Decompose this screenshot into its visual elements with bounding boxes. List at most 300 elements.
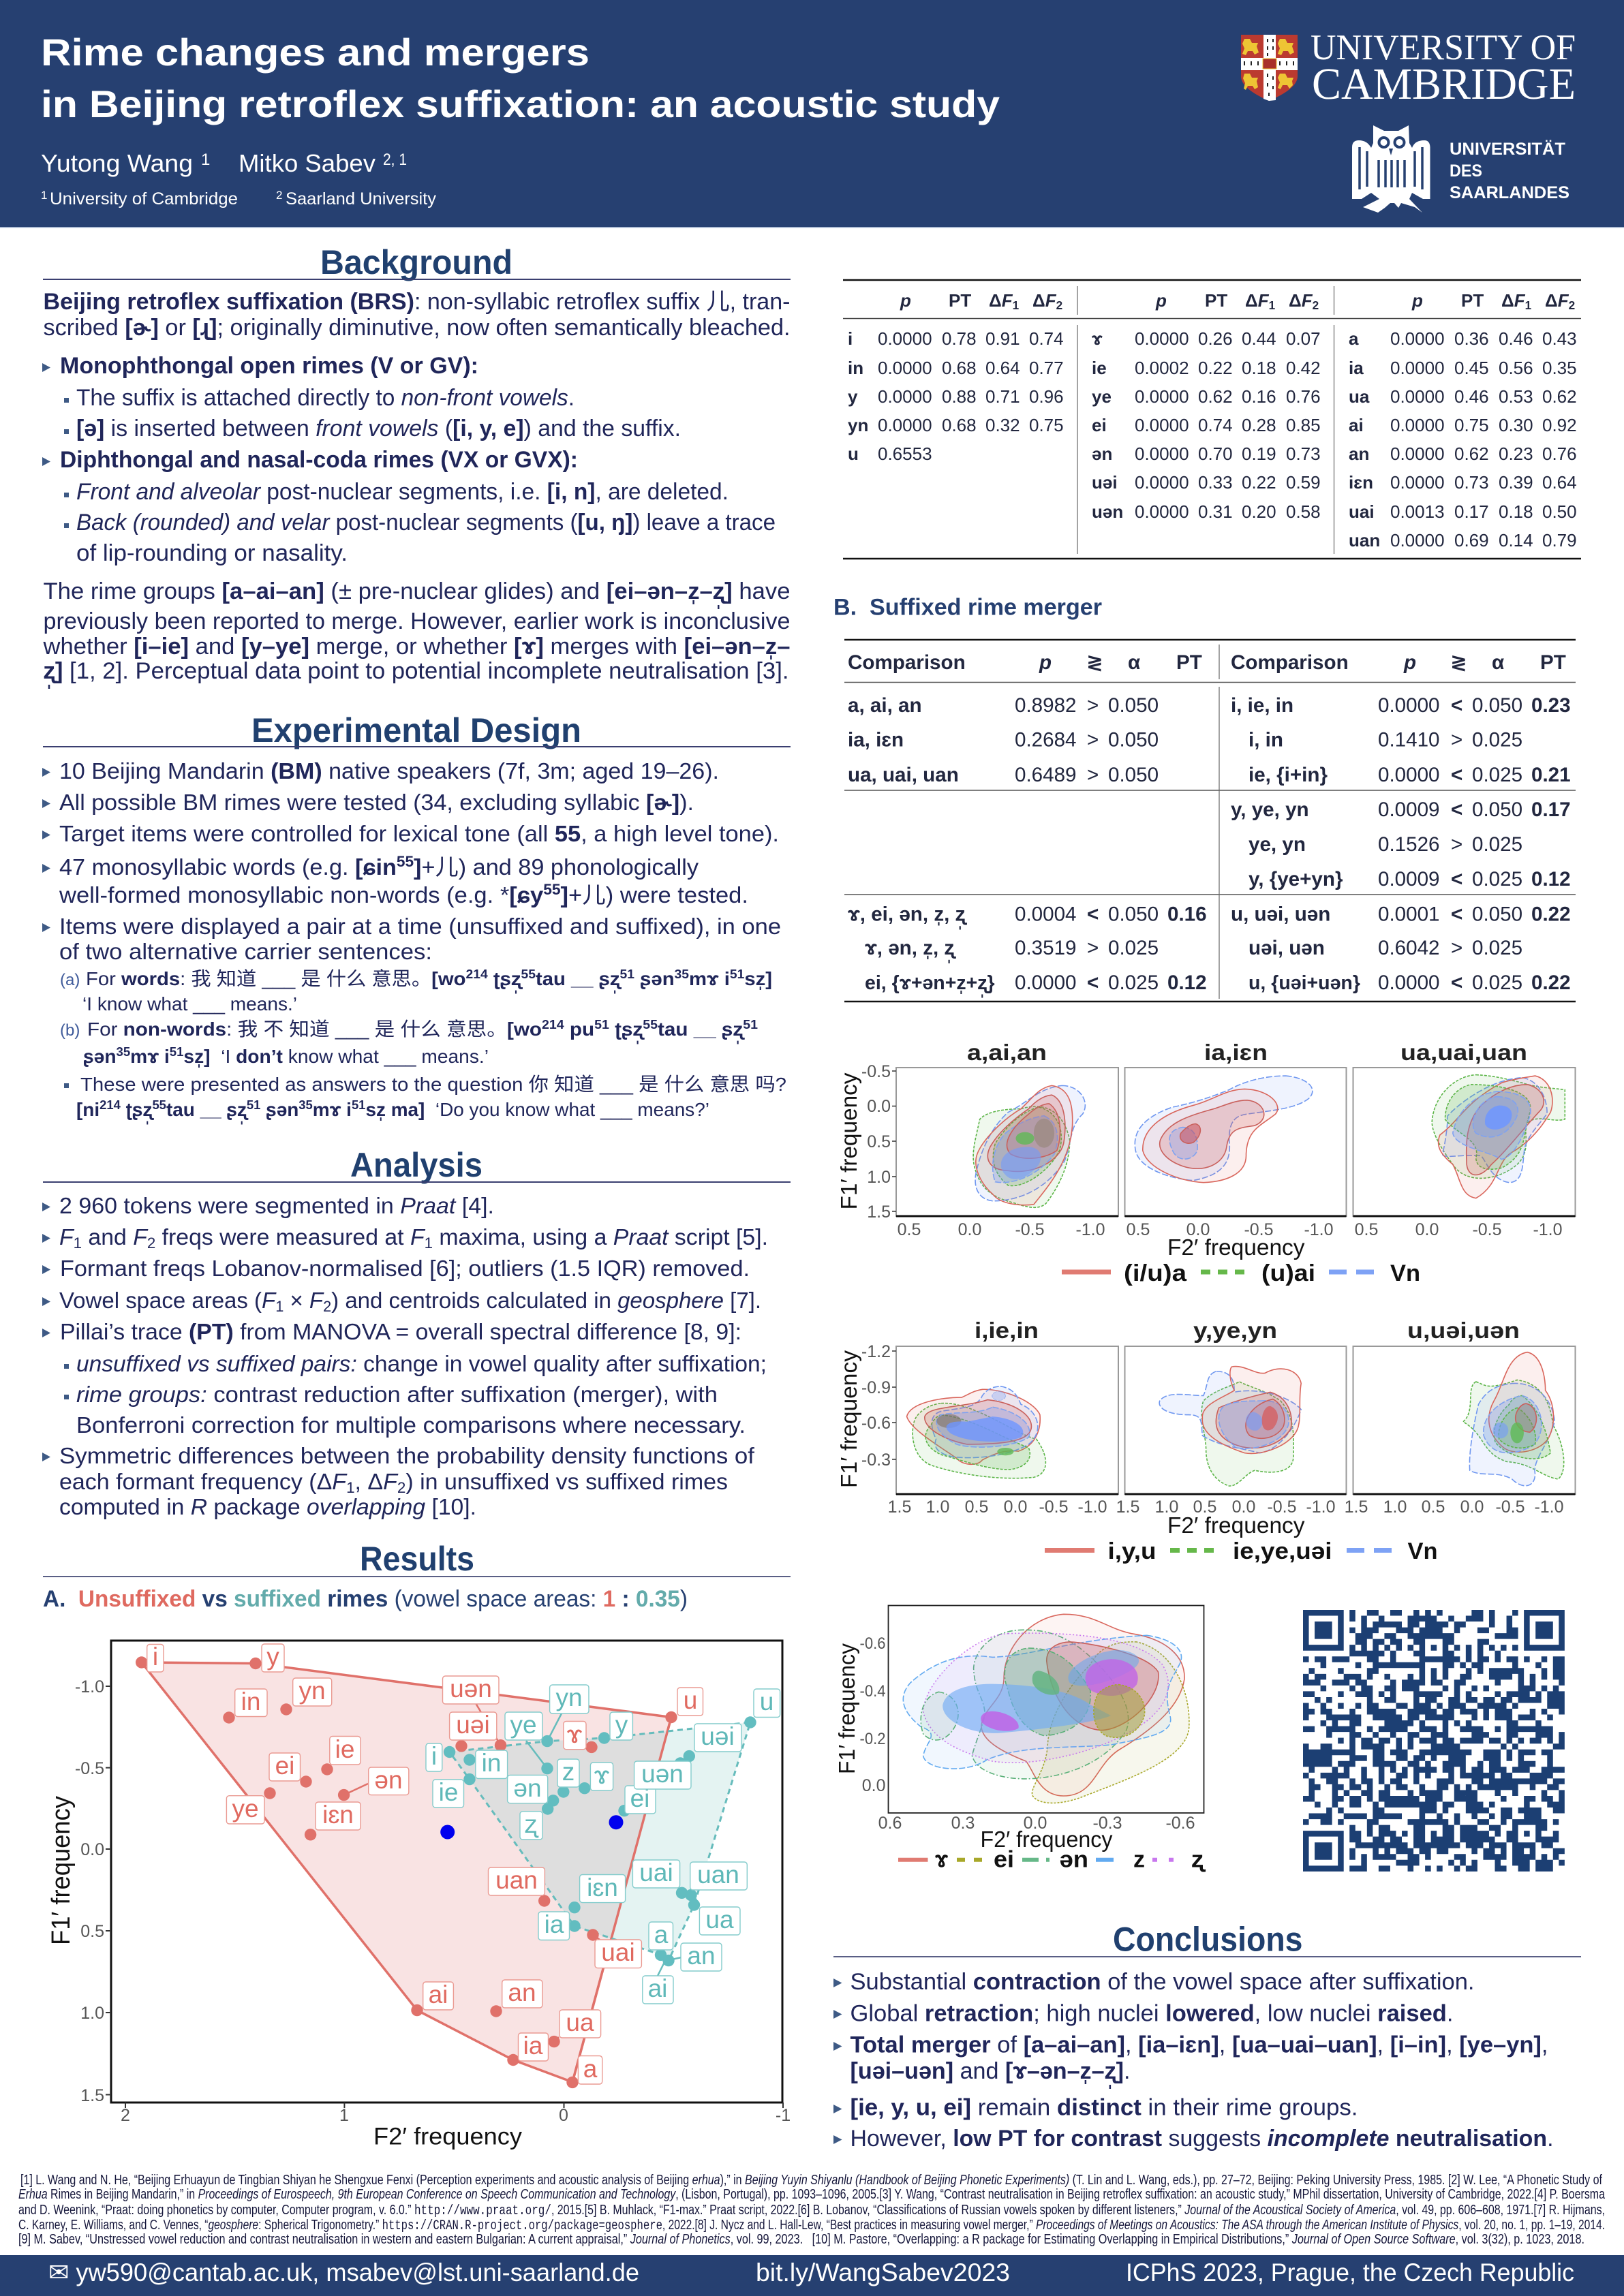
axis ticks: 1.0 xyxy=(80,2004,104,2023)
table rows: 0.0009 xyxy=(1378,798,1440,821)
axis ticks: -0.5 xyxy=(75,1759,104,1778)
panel frames xyxy=(896,1346,1576,1494)
table rows: > xyxy=(1451,937,1462,959)
tick labels: -1.0 xyxy=(1304,1220,1334,1239)
bullet list: conclusions: [uəi–uən] and [ɤ–ən–z̩–ʐ̩]. xyxy=(851,2058,1130,2089)
axis ticks: -1.0 xyxy=(75,1677,104,1696)
footer xyxy=(0,2255,1624,2296)
text block: previous work xyxy=(42,578,791,689)
table rows: 0.32 xyxy=(985,415,1020,435)
labels: suffixed rimes: in xyxy=(482,1749,501,1777)
labels: unsuffixed rimes: ie xyxy=(335,1735,354,1763)
table rows: 0.025 xyxy=(1472,937,1522,959)
table rows: ai xyxy=(1349,415,1364,435)
bullet list: rime types: of lip-rounding or nasality. xyxy=(76,540,348,566)
axis ticks: 2 xyxy=(121,2106,130,2125)
labels: unsuffixed rimes: a xyxy=(583,2055,598,2083)
tick labels: -0.9 xyxy=(861,1378,891,1397)
table rows: 0.85 xyxy=(1286,415,1321,435)
axis ticks: 0.5 xyxy=(80,1922,104,1941)
table rows: 0.23 xyxy=(1499,444,1533,464)
bullet list: rime types: Monophthongal open rimes (V or GV): xyxy=(60,353,478,379)
table rows: 0.2684 xyxy=(1015,729,1077,751)
references: C. Karney, E. Williams, and C. Vennes, “geosphere: Spherical Trigonometry.” https://CRAN.R-project.org/package=geosphere, 2022.[8] J. Nycz and L. Hall-Lew, “Best practices in measuring vowel merger,” Proceedings of Meetings on Acoustics: The ASA through the American Institute of Physics, vol. 20, no. 1, pp. 1–19, 2014. xyxy=(18,2218,1605,2234)
text block: carrier sentences: ʂən35mɤ i51sz̩] ‘I don’t know what ___ means.’ xyxy=(83,1044,489,1068)
table rows: 0.56 xyxy=(1499,358,1533,378)
legend xyxy=(1062,1260,1420,1286)
table rows: > xyxy=(1087,764,1099,786)
bullet list: design: 10 Beijing Mandarin (BM) native speakers (7f, 3m; aged 19–26). xyxy=(59,758,719,784)
table rows: 0.0000 xyxy=(1378,972,1440,994)
bullet list: rime types: Back (rounded) and velar post-nuclear segments ([u, ŋ]) leave a trace xyxy=(76,510,776,536)
table rows: 0.050 xyxy=(1472,694,1522,717)
panel titles: u,uəi,uən xyxy=(1407,1318,1520,1343)
labels: suffixed rimes: y xyxy=(615,1711,628,1739)
panel: analysis xyxy=(42,1146,791,1519)
logo: University of Cambridge xyxy=(1241,28,1576,109)
tick labels: 0.5 xyxy=(867,1132,891,1151)
table rows: 0.74 xyxy=(1198,415,1233,435)
table rows: 0.74 xyxy=(1029,328,1064,349)
header banner xyxy=(0,0,1624,228)
table rows: an xyxy=(1349,444,1369,464)
table rows: 0.50 xyxy=(1542,501,1577,522)
heading B: B. Suffixed rime merger xyxy=(833,594,1102,620)
table rows xyxy=(848,694,1571,998)
tick labels: -1.0 xyxy=(1306,1498,1336,1517)
table rows: 0.77 xyxy=(1029,358,1064,378)
bullet list: rime types: The suffix is attached directly to non-front vowels. xyxy=(76,385,574,411)
table rows: 0.1410 xyxy=(1378,729,1440,751)
table rows: a xyxy=(1349,328,1359,349)
heading: Analysis: Analysis xyxy=(350,1146,482,1184)
labels: suffixed rimes: a xyxy=(654,1921,669,1949)
table rows: uən xyxy=(1092,501,1123,522)
table rows: 0.6489 xyxy=(1015,764,1077,786)
tick labels: -0.5 xyxy=(1472,1220,1502,1239)
labels: suffixed rimes: uən xyxy=(641,1760,684,1788)
table rows: 0.19 xyxy=(1242,444,1276,464)
table rows: y, {ye+yn} xyxy=(1248,868,1343,890)
table rows: 0.21 xyxy=(1531,764,1571,786)
tick labels: 0.0 xyxy=(1004,1498,1027,1517)
table header: ΔF2 xyxy=(1032,290,1062,312)
panel frames xyxy=(896,1068,1576,1216)
bullet list: design: All possible BM rimes were tested (34, excluding syllabic [ɚ]). xyxy=(59,790,694,815)
table rows: 0.0000 xyxy=(1390,444,1445,464)
tick labels: 0.5 xyxy=(1355,1220,1378,1239)
text block: carrier sentences: (a) xyxy=(60,971,80,989)
text block: definition: Beijing retroflex suffixation (BRS): non-syllabic retroflex suffix 儿, tran- xyxy=(44,289,791,315)
panel: conclusions xyxy=(833,1921,1581,2152)
table rows: 0.62 xyxy=(1198,386,1233,407)
tick labels: 0.0 xyxy=(958,1220,981,1239)
area: suffixed vowel space xyxy=(450,1722,750,1961)
table rows: 0.0000 xyxy=(1135,386,1189,407)
table rows: 0.025 xyxy=(1472,972,1522,994)
tick labels: -1.0 xyxy=(1077,1498,1107,1517)
table header: Comparison xyxy=(848,651,966,674)
table header: ΔF2 xyxy=(1545,290,1575,312)
panel titles: a,ai,an xyxy=(967,1040,1047,1065)
labels: unsuffixed rimes: i xyxy=(153,1643,158,1671)
legend: ʐ xyxy=(1191,1846,1206,1872)
labels: unsuffixed rimes: ia xyxy=(523,2032,543,2060)
tick labels xyxy=(860,1634,1195,1833)
table header: α xyxy=(1128,651,1140,674)
text block: carrier sentences xyxy=(60,966,786,1125)
table header: Comparison xyxy=(1231,651,1349,674)
tick labels: 1.5 xyxy=(1116,1498,1139,1517)
bullet list: analysis: 2 960 tokens were segmented in Praat [4]. xyxy=(59,1193,494,1218)
table rows: 0.44 xyxy=(1242,328,1276,349)
table rows: 0.18 xyxy=(1499,501,1533,522)
table rows: a, ai, an xyxy=(848,694,922,717)
axis label: F1: F1′ frequency xyxy=(836,1350,861,1488)
table header: p xyxy=(1155,290,1167,311)
table rows: 0.0000 xyxy=(1378,764,1440,786)
table rows: 0.45 xyxy=(1454,358,1489,378)
table rows: 0.69 xyxy=(1454,530,1489,550)
table rows: 0.0002 xyxy=(1135,358,1189,378)
table rows: 0.17 xyxy=(1531,798,1571,821)
text block: previous work: previously been reported to merge. However, earlier work is inconclusive xyxy=(44,608,791,634)
table rows: > xyxy=(1451,729,1462,751)
tick labels: -0.5 xyxy=(1267,1498,1297,1517)
labels: suffixed rimes: ua xyxy=(705,1906,734,1934)
bullet list: conclusions: Total merger of [a–ai–an], [ia–iɛn], [ua–uai–uan], [i–in], [ye–yn], xyxy=(851,2032,1548,2058)
table rows: 0.0000 xyxy=(1390,415,1445,435)
table rows: 0.75 xyxy=(1029,415,1064,435)
tick labels: -0.5 xyxy=(861,1062,891,1081)
table rows xyxy=(848,328,1577,550)
table rows: 0.36 xyxy=(1454,328,1489,349)
legend xyxy=(898,1846,1206,1872)
table rows: 0.73 xyxy=(1286,444,1321,464)
density contours xyxy=(973,1075,1565,1207)
table rows: > xyxy=(1451,833,1462,856)
labels: unsuffixed rimes: ən xyxy=(374,1766,403,1794)
table rows: 0.64 xyxy=(1542,472,1577,493)
table rows: 0.17 xyxy=(1454,501,1489,522)
tick labels: -0.4 xyxy=(860,1682,886,1701)
table rows: 0.6553 xyxy=(878,444,932,464)
table rows: 0.050 xyxy=(1472,903,1522,925)
table rows: ən xyxy=(1092,444,1112,464)
subheading: Unsuffixed vs suffixed rimes: A. Unsuffixed vs suffixed rimes (vowel space areas: 1 : 0.35) xyxy=(43,1586,688,1612)
bullet list: analysis: Vowel space areas (F1 × F2) and centroids calculated in geosphere [7]. xyxy=(59,1288,761,1315)
labels: suffixed rimes: z xyxy=(562,1758,574,1786)
text block: carrier sentences: For words: 我 知道 ___ 是 什么 意思。 [wo214 ʈʂʐ̩55tau __ ʂʐ̩ 51 ʂən35mɤ i51sz̩] xyxy=(86,966,772,994)
table header: p xyxy=(1411,290,1423,311)
labels: unsuffixed rimes: iɛn xyxy=(322,1801,354,1829)
table rows: 0.8982 xyxy=(1015,694,1077,717)
legend: (i/u)a xyxy=(1124,1260,1187,1286)
labels: unsuffixed rimes xyxy=(147,1643,703,2084)
tick labels: 0.5 xyxy=(898,1220,921,1239)
panel: results A xyxy=(43,1540,791,2150)
plot frame xyxy=(889,1605,1204,1813)
table header: p xyxy=(1039,651,1052,674)
panel: experimental design xyxy=(42,711,791,1125)
bullet list: rime types xyxy=(42,353,776,566)
labels: suffixed rimes: ʐ xyxy=(525,1810,539,1838)
tick labels: -0.6 xyxy=(860,1634,886,1653)
table rows: 0.70 xyxy=(1198,444,1233,464)
chart: density plots row 1 xyxy=(836,1040,1576,1286)
tick labels: 1.0 xyxy=(926,1498,949,1517)
text block: carrier sentences: [ni214 ʈʂʐ̩55tau __ ʂʐ̩51 ʂən35mɤ i51sz̩ ma] ‘Do you know what ___ means?’ xyxy=(76,1097,709,1125)
table rows: 0.46 xyxy=(1499,328,1533,349)
axis ticks xyxy=(75,1677,791,2125)
tick labels: 0.0 xyxy=(867,1097,891,1116)
tick labels: -1.0 xyxy=(1075,1220,1105,1239)
table rows: 0.30 xyxy=(1499,415,1533,435)
tick labels: 0.0 xyxy=(1232,1498,1255,1517)
labels: suffixed rimes: iɛn xyxy=(587,1874,618,1902)
table rows: 0.025 xyxy=(1472,729,1522,751)
table rows: 0.22 xyxy=(1531,903,1571,925)
table rows: 0.0000 xyxy=(1390,328,1445,349)
logo: Universität des Saarlandes: UNIVERSITÄT xyxy=(1450,140,1565,159)
table rows: < xyxy=(1451,903,1462,925)
logo: Universität des Saarlandes: DES xyxy=(1450,161,1482,181)
labels: suffixed rimes: uəi xyxy=(701,1722,735,1750)
axis ticks: -1 xyxy=(776,2106,791,2125)
labels: unsuffixed rimes: u xyxy=(684,1686,697,1714)
heading: Conclusions: Conclusions xyxy=(1113,1921,1303,1959)
density contours xyxy=(907,1352,1564,1486)
table header: ≷ xyxy=(1450,651,1467,674)
table rows: 0.96 xyxy=(1029,386,1064,407)
labels: unsuffixed rimes: uai xyxy=(601,1938,635,1966)
tick labels: -0.6 xyxy=(1165,1814,1195,1833)
authors: Mitko Sabev xyxy=(239,149,376,177)
table rows: ia, iɛn xyxy=(848,729,904,751)
table rows: 0.16 xyxy=(1242,386,1276,407)
panel titles xyxy=(967,1040,1527,1065)
labels: suffixed rimes: ia xyxy=(545,1910,564,1938)
table rows: uəi xyxy=(1092,472,1118,493)
references: and D. Weenink, “Praat: doing phonetics by computer, Computer program, v. 6.0.” http://www.praat.org/, 2015.[5] B. Muhlack, “F1-max.” Praat script, 2022.[6] B. Lobanov, “Classifications of Russian vowels spoken by different listeners,” Journal of the Acoustical Society of America, vol. 49, pp. 606–608, 1971.[7] R. Hijmans, xyxy=(18,2203,1605,2219)
tick labels: -1.0 xyxy=(1534,1498,1564,1517)
axis label: F1: F1′ frequency xyxy=(834,1643,859,1774)
table rows: yn xyxy=(848,415,868,435)
table rows: ɤ, ei, ən, z̩, ʐ̩ xyxy=(848,903,968,929)
labels: suffixed rimes: uai xyxy=(639,1859,673,1887)
table rows: > xyxy=(1087,729,1099,751)
markers: red and teal points xyxy=(136,1656,756,2088)
table rows: y xyxy=(848,386,858,407)
title: Rime changes and mergers xyxy=(41,31,589,74)
table rows: ie, {i+in} xyxy=(1248,764,1328,786)
text block: previous work: ʐ̩] [1, 2]. Perceptual data point to potential incomplete neutralisation [3]. xyxy=(44,658,789,689)
tick labels: -1.2 xyxy=(861,1342,891,1361)
tick labels: 0.5 xyxy=(1193,1498,1216,1517)
bullet list: rime types: Front and alveolar post-nuclear segments, i.e. [i, n], are deleted. xyxy=(76,479,729,505)
table rows: 0.0000 xyxy=(1378,694,1440,717)
table rows: 0.68 xyxy=(942,358,977,378)
tick labels: -0.6 xyxy=(861,1414,891,1433)
bullet list: rime types: [ə] is inserted between front vowels ([i, y, e]) and the suffix. xyxy=(76,416,681,441)
footer: ICPhS 2023, Prague, the Czech Republic xyxy=(1126,2259,1574,2286)
table rows: < xyxy=(1451,868,1462,890)
table rows: 0.0013 xyxy=(1390,501,1445,522)
text block: carrier sentences: These were presented as answers to the question 你 知道 ___ 是 什么 意思 吗? xyxy=(80,1074,786,1095)
table rows: 0.0001 xyxy=(1378,903,1440,925)
axis label: F1: F1′ frequency xyxy=(836,1072,861,1210)
affiliations: University of Cambridge xyxy=(50,189,238,208)
table rows: ia xyxy=(1349,358,1364,378)
table rows: < xyxy=(1451,798,1462,821)
table rows: ua, uai, uan xyxy=(848,764,959,786)
bullet list: conclusions: Global retraction; high nuclei lowered, low nuclei raised. xyxy=(851,2000,1453,2026)
table rows: 0.62 xyxy=(1454,444,1489,464)
legend: ei xyxy=(994,1846,1014,1872)
bullet list: analysis: each formant frequency (Δ F1, ΔF2) in unsuffixed vs suffixed rimes xyxy=(59,1469,728,1496)
legend: z xyxy=(1133,1846,1145,1872)
tick labels: 1.5 xyxy=(1345,1498,1368,1517)
chart: vowel space polygons xyxy=(47,1641,791,2150)
labels: suffixed rimes: ən xyxy=(513,1774,542,1802)
legend xyxy=(1045,1538,1438,1564)
table header: ΔF2 xyxy=(1289,290,1319,312)
table rows: 0.0009 xyxy=(1378,868,1440,890)
table rows: 0.0000 xyxy=(1390,358,1445,378)
tick labels: 0.0 xyxy=(1186,1220,1210,1239)
tick labels: 0.5 xyxy=(1127,1220,1150,1239)
axis label: F2: F2′ frequency xyxy=(1167,1235,1305,1260)
tick labels: 0.0 xyxy=(1460,1498,1484,1517)
labels: suffixed rimes: uan xyxy=(697,1861,739,1889)
labels: unsuffixed rimes: ei xyxy=(275,1752,294,1780)
text block: carrier sentences: (b) xyxy=(60,1021,80,1040)
table rows: i, in xyxy=(1248,729,1283,751)
table rows: 0.91 xyxy=(985,328,1020,349)
logo: University of Cambridge: CAMBRIDGE xyxy=(1312,59,1576,109)
bullet list: design: Items were displayed a pair at a time (unsuffixed and suffixed), in one xyxy=(59,914,781,939)
title: in Beijing retroflex suffixation: an acoustic study xyxy=(41,82,1000,125)
tick labels: -0.5 xyxy=(1015,1220,1045,1239)
table rows: < xyxy=(1087,972,1099,994)
labels: unsuffixed rimes: ɤ xyxy=(567,1720,583,1748)
axis label: F2: F2′ frequency xyxy=(373,2123,523,2150)
panel titles: i,ie,in xyxy=(975,1318,1039,1343)
table rows: 0.71 xyxy=(985,386,1020,407)
table header: α xyxy=(1492,651,1504,674)
panel: results table A xyxy=(843,280,1581,559)
panel: background xyxy=(42,243,791,689)
authors: Yutong Wang xyxy=(41,149,193,177)
labels: unsuffixed rimes: ai xyxy=(429,1981,448,2008)
bullet list: conclusions: [ie, y, u, ei] remain distinct in their rime groups. xyxy=(851,2094,1358,2120)
table rows: 0.20 xyxy=(1242,501,1276,522)
table rows: 0.31 xyxy=(1198,501,1233,522)
title xyxy=(41,31,1000,125)
table rows: 0.92 xyxy=(1542,415,1577,435)
table header: PT xyxy=(1205,290,1227,311)
panel titles: y,ye,yn xyxy=(1193,1318,1277,1343)
bullet list: design: well-formed monosyllabic non-words (e.g. * [ɕy55]+儿) were tested. xyxy=(59,880,748,907)
table rows: 0.35 xyxy=(1542,358,1577,378)
tick labels: -0.3 xyxy=(861,1450,891,1470)
table rows: ie xyxy=(1092,358,1107,378)
table rows: 0.76 xyxy=(1542,444,1577,464)
tick labels: 1.0 xyxy=(1383,1498,1407,1517)
heading: Background: Background xyxy=(320,243,512,281)
labels: suffixed rimes: ie xyxy=(439,1778,458,1806)
authors: 1 xyxy=(201,151,210,169)
table rows: 0.025 xyxy=(1108,937,1159,959)
labels: suffixed rimes: ye xyxy=(510,1711,537,1739)
tick labels: 0.0 xyxy=(1415,1220,1439,1239)
table rows: 0.46 xyxy=(1454,386,1489,407)
table rows: 0.025 xyxy=(1108,972,1159,994)
table rows: iɛn xyxy=(1349,472,1373,493)
bullet list: analysis: Bonferroni correction for multiple comparisons where necessary. xyxy=(76,1412,746,1438)
table rows: 0.0000 xyxy=(1135,444,1189,464)
logo: University of Cambridge: UNIVERSITY OF xyxy=(1311,28,1576,67)
table rows: 0.0000 xyxy=(878,328,932,349)
tick labels: 0.5 xyxy=(965,1498,988,1517)
density contours xyxy=(903,1614,1189,1803)
labels: suffixed rimes: i xyxy=(431,1742,437,1770)
table rows: ei xyxy=(1092,415,1107,435)
logo: Universität des Saarlandes xyxy=(1352,125,1569,213)
tick labels: -0.5 xyxy=(1039,1498,1069,1517)
table rows: 0.12 xyxy=(1167,972,1207,994)
labels: suffixed rimes: ai xyxy=(648,1974,667,2002)
tick labels: -0.3 xyxy=(1092,1814,1122,1833)
table rows: 0.23 xyxy=(1531,694,1571,717)
table rows: u, {uəi+uən} xyxy=(1248,972,1360,994)
references: [9] M. Sabev, “Unstressed vowel reduction and contrast neutralisation in western and eastern Bulgarian: A current appraisal,” Journal of Phonetics, vol. 99, 2023. [10] M. Pastore, “Overlapping: a R package for Estimating Overlapping in Empirical Distributions,” Journal of Open Source Software, vol. 3(32), p. 1023, 2018. xyxy=(18,2232,1584,2247)
table rows: < xyxy=(1087,903,1099,925)
table rows: ye, yn xyxy=(1248,833,1306,856)
QR code xyxy=(1303,1610,1565,1872)
table rows: 0.0000 xyxy=(1390,530,1445,550)
labels: unsuffixed rimes: an xyxy=(508,1979,536,2006)
table rows: < xyxy=(1451,972,1462,994)
bullet list: rime types: Diphthongal and nasal-coda rimes (VX or GVX): xyxy=(60,447,578,473)
panel titles: ua,uai,uan xyxy=(1400,1040,1527,1065)
table rows: 0.0000 xyxy=(1135,415,1189,435)
bullet list: analysis: unsuffixed vs suffixed pairs: change in vowel quality after suffixation; xyxy=(76,1351,767,1376)
table rows: 0.79 xyxy=(1542,530,1577,550)
bullet list: conclusions: Substantial contraction of the vowel space after suffixation. xyxy=(851,1969,1475,1995)
table rows: 0.58 xyxy=(1286,501,1321,522)
tick labels: -0.2 xyxy=(860,1730,886,1748)
table rows: 0.0000 xyxy=(878,415,932,435)
text block: previous work: whether [i–ie] and [y–ye] merge, or whether [ɤ] merges with [ei–ən–z̩– xyxy=(42,634,791,660)
panel titles xyxy=(975,1318,1520,1343)
table rows: 0.025 xyxy=(1472,764,1522,786)
text block: carrier sentences: ‘I know what ___ means.’ xyxy=(82,993,297,1014)
table header: p xyxy=(1403,651,1416,674)
legend: ie,ye,uəi xyxy=(1233,1538,1332,1564)
table rows: 0.62 xyxy=(1542,386,1577,407)
table header: ΔF1 xyxy=(1245,290,1275,312)
area: unsuffixed vowel space xyxy=(142,1662,671,2082)
table rows: 0.22 xyxy=(1242,472,1276,493)
bullet list: analysis: Pillai’s trace (PT) from MANOVA = overall spectral difference [8, 9]: xyxy=(60,1319,741,1344)
tick labels: 0.5 xyxy=(1422,1498,1445,1517)
labels: unsuffixed rimes: y xyxy=(266,1643,279,1671)
table rows: 0.025 xyxy=(1472,868,1522,890)
table rows: ei, {ɤ+ən+z̩+ʐ̩} xyxy=(865,972,995,998)
axis label: F2: F2′ frequency xyxy=(980,1827,1113,1852)
table header: PT xyxy=(949,290,971,311)
